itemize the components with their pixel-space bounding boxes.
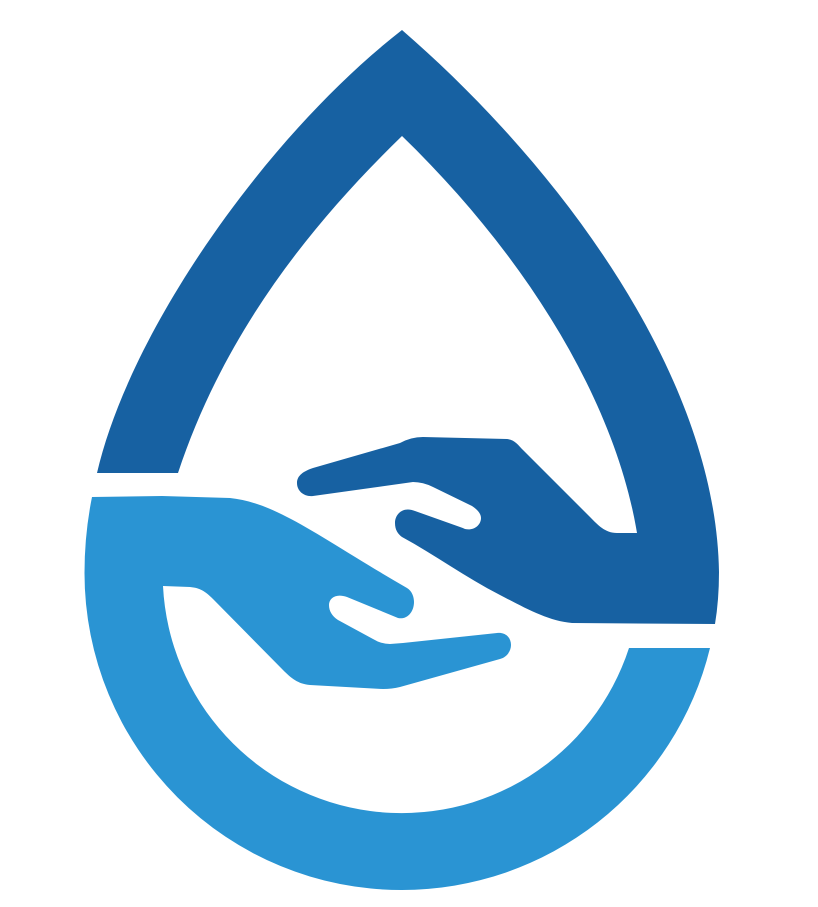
lower drop with light blue hand — [84, 496, 710, 890]
upper drop with dark blue hand — [97, 30, 719, 624]
